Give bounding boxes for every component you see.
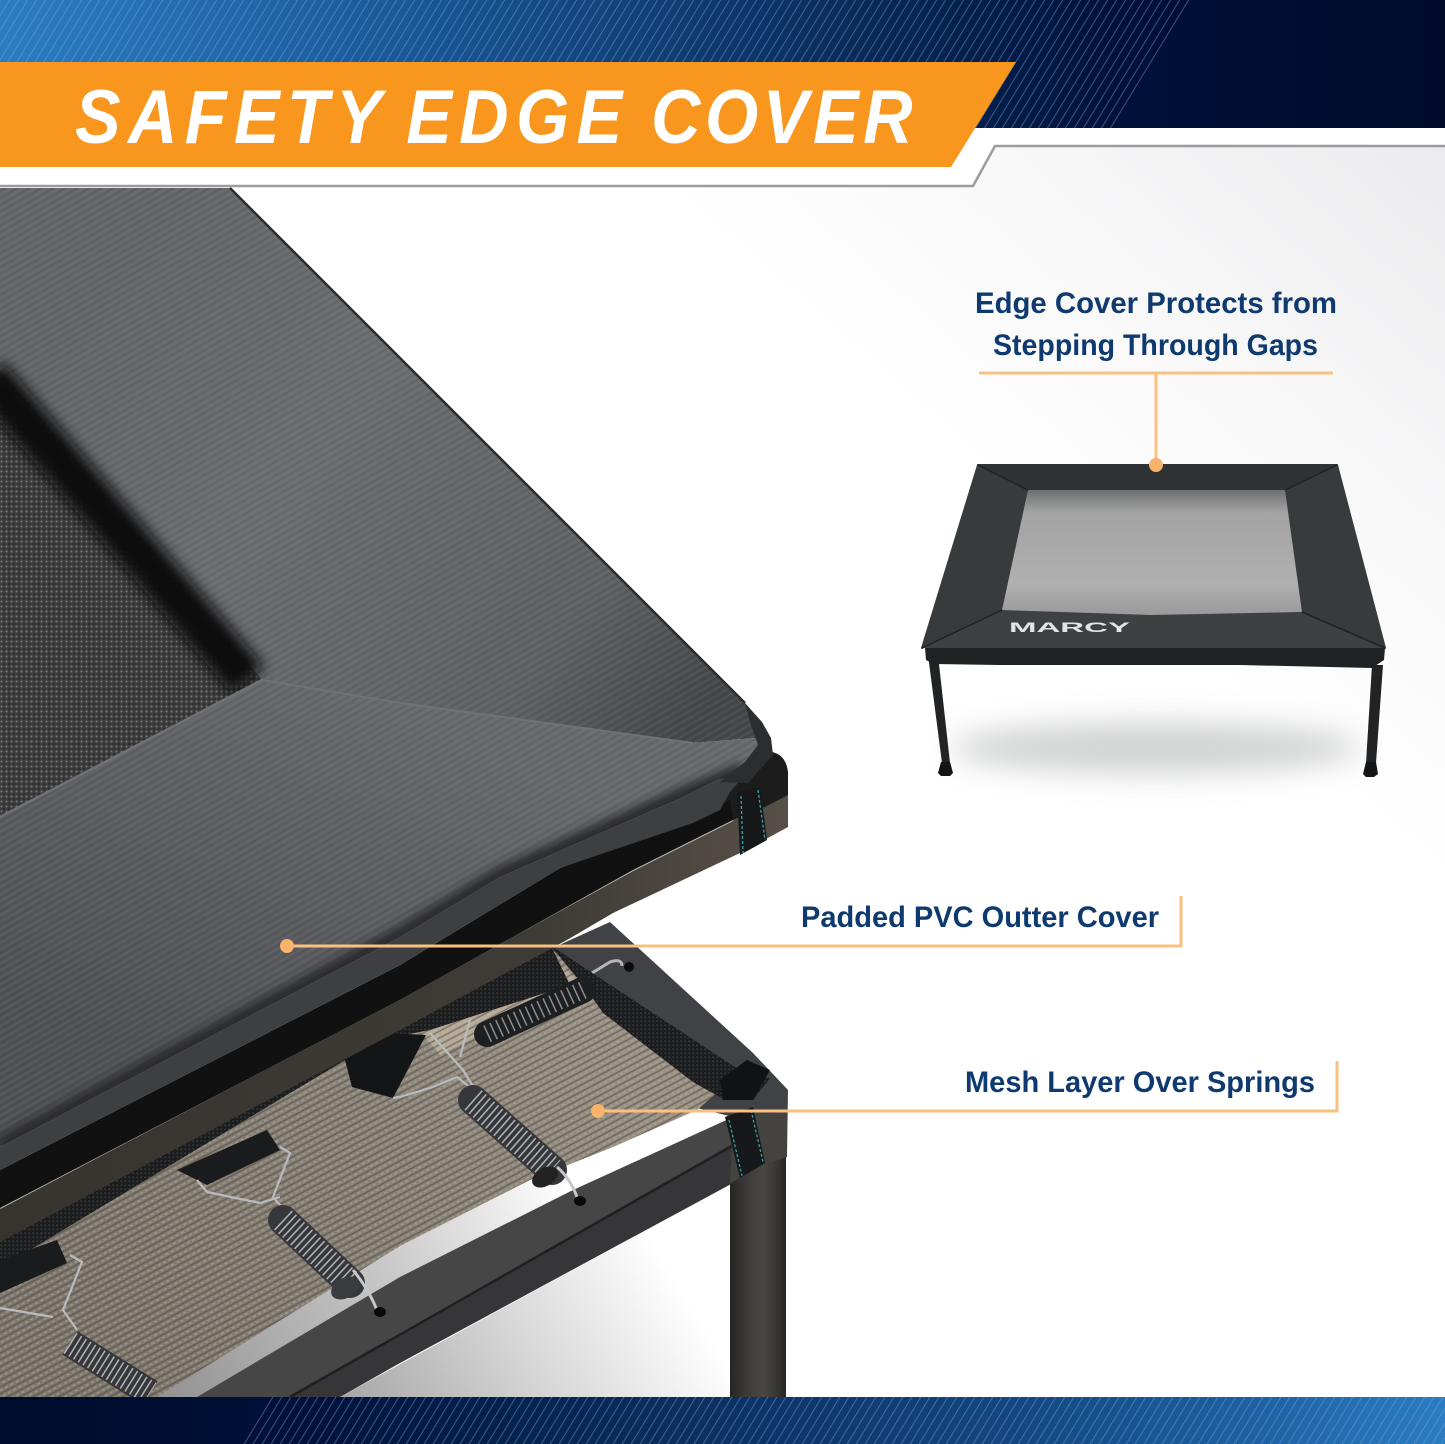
footer band: [0, 1397, 1445, 1444]
brand logo: MARCY: [1009, 619, 1132, 635]
callout: padded PVC cover: [280, 896, 1181, 953]
ground shadow: [950, 722, 1360, 774]
pad corner and strap: [720, 703, 773, 855]
callout: mesh layer: Mesh Layer Over Springs: [965, 1066, 1315, 1099]
back spring hook and hole: [592, 961, 634, 973]
lower front frame bar: [197, 1117, 737, 1397]
steel leg: [730, 1150, 786, 1397]
photo: close-up of trampoline corner: [0, 188, 788, 1400]
pad: lower panel: [0, 680, 773, 1147]
callout: mesh layer: [591, 1061, 1337, 1118]
legs: [928, 655, 1383, 777]
upper front frame bar: [0, 795, 788, 1242]
frame corner top: [712, 752, 788, 820]
wire lacing: [0, 1020, 477, 1330]
side frame bar: [548, 922, 788, 1117]
black gap under pad: [0, 800, 733, 1208]
title banner: SAFETY: [75, 76, 414, 160]
callout: padded PVC cover: Padded PVC Outter Cover: [801, 901, 1159, 934]
skirt: [925, 648, 1385, 668]
black mesh border: [0, 945, 770, 1293]
tan mesh layer: [0, 948, 720, 1397]
trampoline mesh: [1002, 490, 1302, 615]
springs: [70, 990, 586, 1393]
pad: upper panel: [0, 188, 767, 743]
centre mesh of the jumping surface: [0, 370, 270, 820]
floor shadows: [140, 1108, 733, 1400]
header band: [0, 0, 1445, 128]
joint and leg top with strap: [725, 1090, 788, 1183]
photo: full mini trampoline: [922, 465, 1385, 777]
callout: edge cover: Stepping Through Gaps: [993, 329, 1318, 362]
callout: edge cover: [975, 287, 1337, 472]
title banner: EDGE: [406, 76, 656, 160]
white strip with grey outline: [0, 128, 1445, 186]
title banner: COVER: [651, 76, 917, 160]
shadow between pad and centre mesh: [0, 376, 248, 680]
callout: edge cover: Edge Cover Protects from: [975, 287, 1337, 320]
pad hem: [0, 775, 745, 1170]
pad panels: [922, 465, 1385, 648]
title banner: [0, 62, 1016, 167]
